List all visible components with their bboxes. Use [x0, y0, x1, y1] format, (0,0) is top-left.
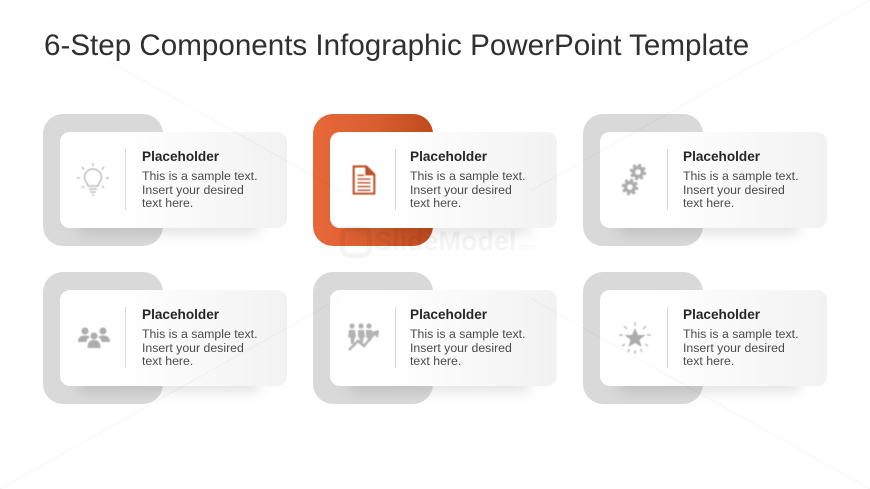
text block: Placeholder — [142, 149, 219, 164]
card — [600, 290, 827, 386]
text block: text here. — [410, 196, 461, 210]
backing square — [583, 272, 703, 404]
backing square — [313, 114, 433, 246]
card — [330, 290, 557, 386]
text block: text here. — [683, 354, 734, 368]
text block — [410, 307, 526, 368]
text block — [683, 149, 798, 210]
watermark text: SlideModel.com — [374, 226, 536, 256]
icon: document — [352, 164, 376, 196]
panel: step 3 gears — [583, 114, 827, 246]
text block: This is a sample text. — [142, 327, 258, 341]
text block: This is a sample text. — [142, 169, 258, 183]
text block: Placeholder — [683, 307, 760, 322]
divider — [125, 149, 126, 210]
text block: Insert your desired — [410, 341, 512, 355]
panel: step 2 document highlighted — [313, 114, 557, 246]
text block: This is a sample text. — [683, 169, 798, 183]
title: 6-Step Components Infographic PowerPoint Template — [44, 29, 749, 62]
icon: people and rising arrow — [348, 323, 380, 351]
backing square — [313, 272, 433, 404]
watermark icon — [340, 226, 372, 258]
text block: Placeholder — [683, 149, 760, 164]
text block: text here. — [683, 196, 734, 210]
divider — [395, 149, 396, 210]
divider — [667, 307, 668, 368]
icon: gears — [621, 163, 647, 196]
text block: Insert your desired — [142, 341, 244, 355]
divider — [125, 307, 126, 368]
backing square — [43, 114, 163, 246]
text block — [142, 149, 258, 210]
text block: Placeholder — [410, 307, 487, 322]
card shadow — [349, 220, 529, 232]
icon: star with rays — [618, 322, 652, 354]
text block: Placeholder — [142, 307, 219, 322]
text block: Insert your desired — [142, 183, 244, 197]
text block: Insert your desired — [683, 183, 785, 197]
text block: This is a sample text. — [410, 169, 526, 183]
text block: Placeholder — [410, 149, 487, 164]
panel: step 1 idea — [43, 114, 287, 246]
text block: text here. — [142, 196, 193, 210]
card shadow — [349, 378, 529, 390]
text block: text here. — [142, 354, 193, 368]
card — [330, 132, 557, 228]
panel: step 5 growth — [313, 272, 557, 404]
panel: step 6 star — [583, 272, 827, 404]
text block — [410, 149, 526, 210]
divider — [395, 307, 396, 368]
watermark logo — [340, 226, 536, 258]
text block — [142, 307, 258, 368]
card — [60, 290, 287, 386]
text block: This is a sample text. — [683, 327, 798, 341]
card shadow — [79, 378, 259, 390]
text block: Insert your desired — [410, 183, 512, 197]
panel: step 4 team — [43, 272, 287, 404]
card shadow — [79, 220, 259, 232]
backing square — [583, 114, 703, 246]
card shadow — [619, 220, 799, 232]
card shadow — [619, 378, 799, 390]
text block: text here. — [410, 354, 461, 368]
text block: This is a sample text. — [410, 327, 526, 341]
card — [60, 132, 287, 228]
icon: light bulb — [76, 162, 110, 196]
text block: Insert your desired — [683, 341, 785, 355]
backing square — [43, 272, 163, 404]
icon: team of three — [78, 327, 110, 348]
text block — [683, 307, 798, 368]
card — [600, 132, 827, 228]
divider — [667, 149, 668, 210]
